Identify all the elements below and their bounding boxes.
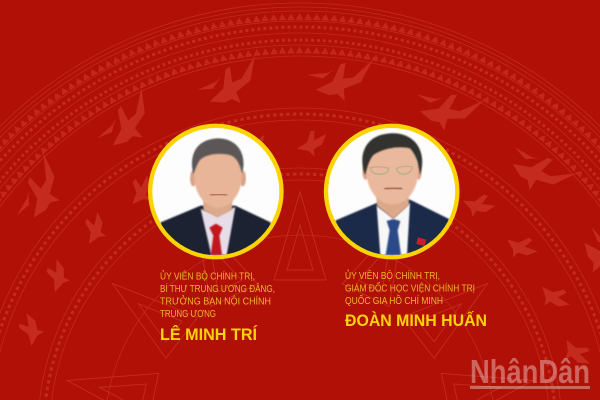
ears — [362, 166, 368, 180]
portrait: Lê Minh Trí — [150, 126, 281, 262]
face — [366, 146, 418, 204]
text: Lê Minh Trí title — [160, 270, 275, 320]
eyes — [203, 171, 233, 178]
face — [194, 153, 242, 207]
text: Đoàn Minh Huấn title: QUỐC GIA HỒ CHÍ MINH — [345, 293, 443, 307]
name: Đoàn Minh Huấn: ĐOÀN MINH HUẤN — [345, 311, 487, 330]
text: Đoàn Minh Huấn title: GIÁM ĐỐC HỌC VIỆN CHÍNH TRỊ — [345, 280, 475, 294]
tie — [209, 224, 223, 255]
shirt — [201, 207, 235, 255]
name: Lê Minh Trí: LÊ MINH TRÍ — [160, 325, 258, 344]
drum star rays — [62, 192, 538, 400]
neck — [376, 196, 410, 220]
text: Lê Minh Trí title: TRUNG ƯƠNG — [160, 309, 216, 320]
shirt — [377, 203, 410, 255]
flag pin — [416, 237, 426, 246]
mouth — [384, 188, 402, 189]
eyes — [375, 167, 409, 173]
suit — [336, 200, 449, 262]
hair — [362, 133, 422, 175]
tie — [386, 219, 401, 255]
suit — [161, 206, 271, 262]
text: Lê Minh Trí title: BÍ THƯ TRUNG ƯƠNG ĐẢNG, — [160, 282, 275, 295]
text: Đoàn Minh Huấn title: ỦY VIÊN BỘ CHÍNH TRỊ, — [345, 269, 440, 282]
mouth — [210, 194, 227, 195]
text: Lê Minh Trí title: TRƯỞNG BAN NỘI CHÍNH — [160, 294, 271, 308]
text: Lê Minh Trí title: ỦY VIÊN BỘ CHÍNH TRỊ, — [160, 270, 255, 282]
hair — [192, 138, 244, 174]
portrait: Đoàn Minh Huấn — [326, 126, 457, 262]
text: Đoàn Minh Huấn title — [345, 269, 475, 307]
ears — [190, 170, 197, 186]
neck — [202, 200, 234, 218]
glasses — [370, 166, 412, 174]
